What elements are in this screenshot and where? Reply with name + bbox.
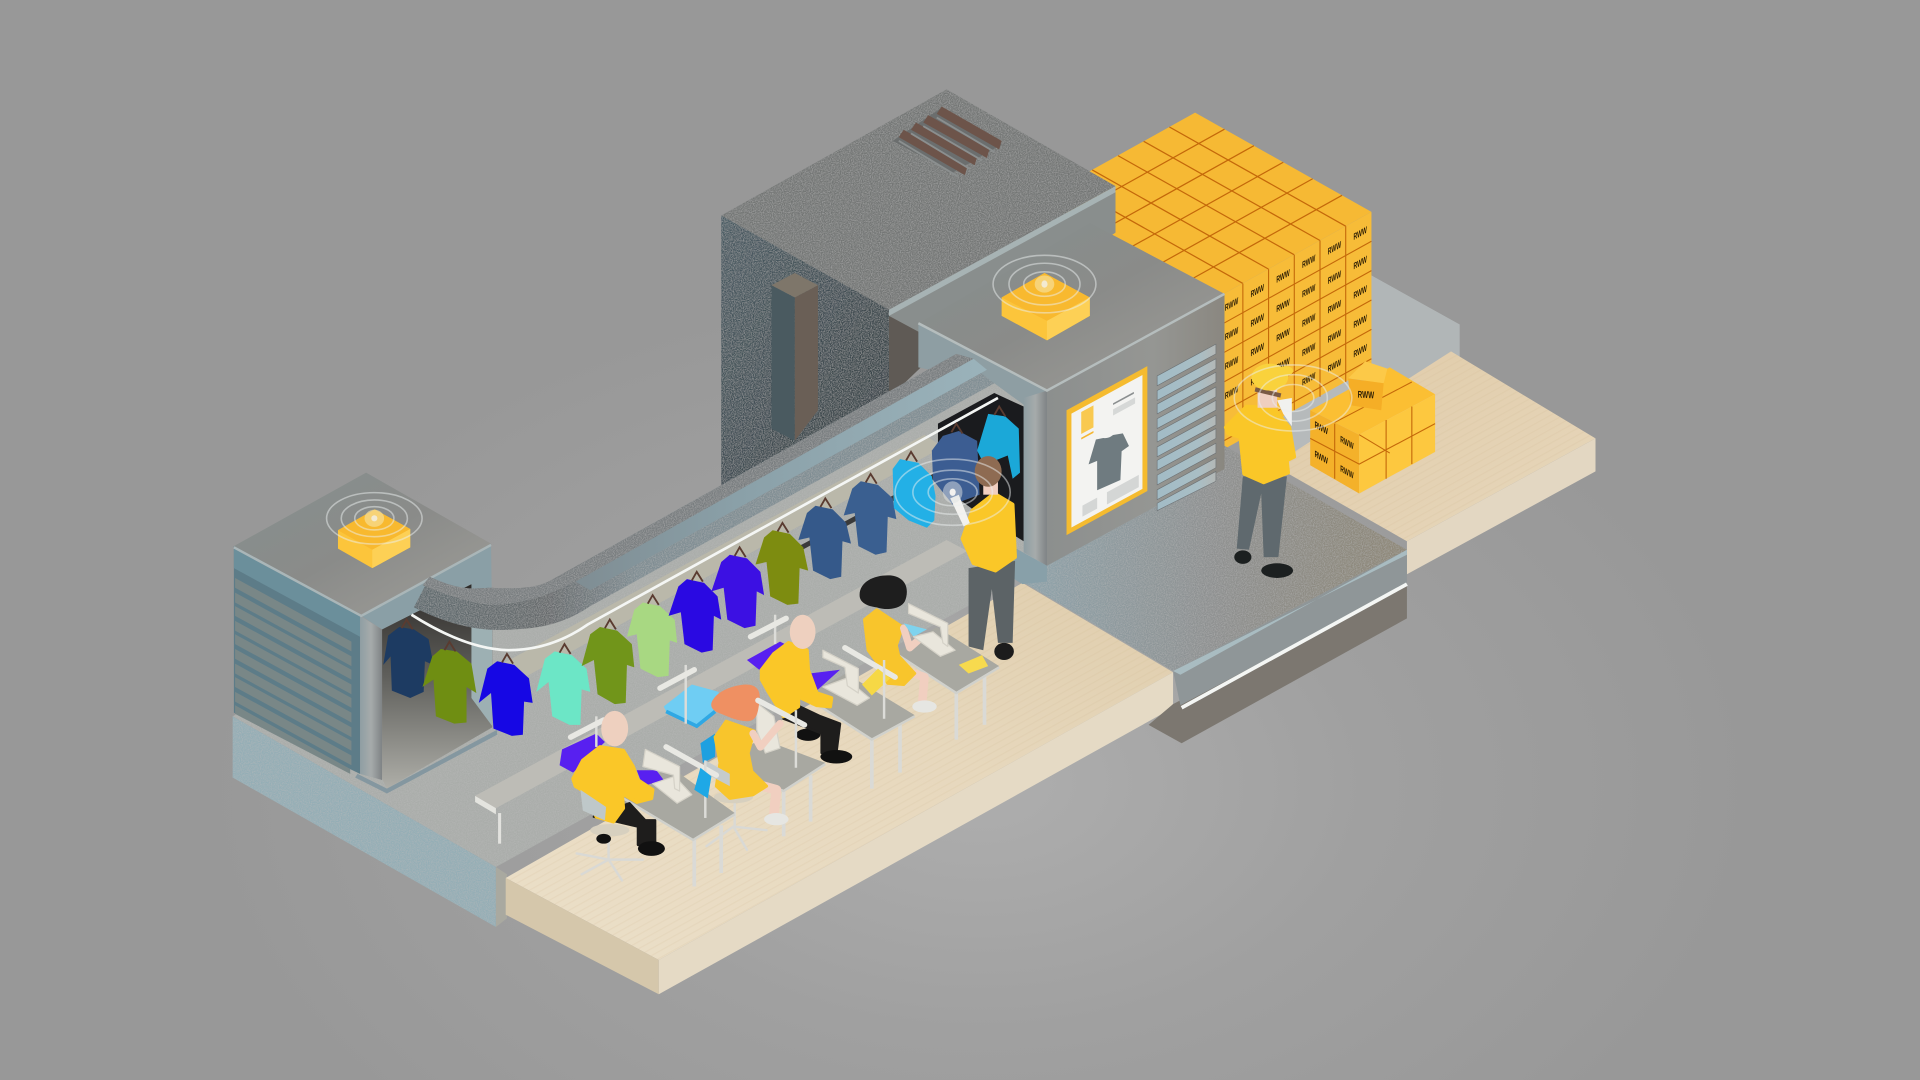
- shirt: mint: [536, 644, 590, 725]
- fabric stack purple: [747, 642, 790, 670]
- wood platform: right: [1273, 351, 1596, 574]
- worker 2 shoe: [764, 813, 789, 825]
- lower slab: [1149, 582, 1407, 743]
- machine right face: [1047, 294, 1224, 566]
- cube opening with dark back wall: [382, 584, 492, 789]
- hanging t-shirts: [383, 407, 1020, 736]
- cyan cloth hanging: [694, 768, 711, 798]
- worker neck: [1258, 389, 1277, 408]
- wood platform: long front: [506, 583, 1173, 994]
- chair 1 back: [580, 790, 606, 820]
- stack box top: [1310, 367, 1435, 435]
- shirt: cyan: [893, 452, 936, 528]
- small box stack: RWW: [1315, 419, 1328, 437]
- stack side face: RWW: [1251, 370, 1264, 388]
- worker cap: [1251, 364, 1293, 391]
- stack side face: RWW: [1225, 324, 1239, 343]
- stack box right: [1359, 394, 1435, 493]
- stack side face: RWW: [1225, 354, 1239, 372]
- stack side face: RWW: [1302, 340, 1316, 359]
- machine opening: [938, 393, 1024, 541]
- worker 1 head: [601, 711, 628, 746]
- duct lit band: [576, 359, 987, 590]
- table 2 with seated worker: [660, 665, 825, 850]
- conveyor work table: [475, 540, 967, 844]
- stack side face: RWW: [1251, 311, 1264, 329]
- stack top face: [1041, 113, 1371, 298]
- stack side face: RWW: [1302, 281, 1316, 300]
- stack side face: RWW: [1302, 370, 1316, 388]
- slab top: [1022, 446, 1407, 671]
- small box stack: RWW: [1340, 434, 1354, 452]
- sewing machine 1: [643, 749, 692, 803]
- duct upper band: [422, 354, 973, 605]
- stack side face: RWW: [1354, 283, 1367, 301]
- worker 3 pants: [784, 707, 840, 753]
- worker 1 far shoe: [596, 834, 611, 844]
- pillar on building wall: [771, 273, 818, 441]
- supervisor paper: [950, 495, 970, 527]
- rod divider: [751, 615, 786, 644]
- chair 1 base: [577, 824, 643, 880]
- sewing machine 4: [909, 604, 955, 656]
- table 2: [720, 738, 825, 836]
- worker 3 head: [790, 615, 816, 649]
- supervisor neck: [983, 480, 998, 495]
- table 1 with seated worker: [560, 711, 735, 887]
- worker 3 shoe: [820, 750, 852, 763]
- worker 1 shoe: [638, 841, 665, 856]
- supervisor shirt: [962, 493, 1015, 571]
- cube upper right band: [361, 544, 492, 631]
- stack side face: RWW: [1328, 268, 1342, 287]
- signal rings: supervisor paper: [895, 459, 1010, 525]
- stack side face: RWW: [1354, 341, 1367, 360]
- fabric stack violet: [560, 733, 605, 773]
- stack side face: [1217, 212, 1371, 453]
- stack side face: RWW: [1251, 340, 1264, 359]
- stack side face: RWW: [1328, 327, 1342, 345]
- worker 2 hair: [711, 684, 760, 721]
- supervisor head: [975, 456, 1002, 487]
- slab side: [1173, 550, 1407, 705]
- stack side face: RWW: [1354, 312, 1367, 331]
- supervisor shoe: [994, 643, 1014, 660]
- pole 2: [795, 710, 797, 768]
- worker 2 dress: [715, 721, 767, 798]
- worker hair band: [1255, 389, 1281, 396]
- worker 4 hair: [860, 575, 907, 609]
- poster shirt: [1089, 421, 1129, 497]
- fabric stack cyan: [664, 684, 719, 726]
- stack side face: RWW: [1302, 252, 1316, 271]
- concrete left side: [233, 716, 496, 927]
- table 4: [896, 627, 999, 740]
- building top face: [721, 89, 1116, 310]
- worker pants: [1237, 476, 1287, 557]
- cube floor edge: [355, 730, 497, 793]
- light strip: [1182, 584, 1407, 708]
- worker shoes: [1234, 550, 1293, 578]
- small box stack: RWW: [1315, 448, 1328, 467]
- stack box left: [1310, 410, 1359, 493]
- duct body: [414, 354, 994, 630]
- worker 2 arm: [753, 724, 780, 747]
- purple cloth on table: [809, 670, 840, 691]
- roof vent slats: [893, 107, 1002, 176]
- shirt: navy: [383, 620, 433, 698]
- purple cloth: [637, 770, 664, 786]
- worker 1 shirt: [573, 747, 653, 822]
- shirt: blue: [479, 654, 533, 736]
- rod 2: [758, 700, 804, 725]
- stack side face: RWW: [1276, 326, 1290, 344]
- rod 3: [845, 648, 895, 677]
- shirt: slate: [798, 498, 851, 579]
- shirt: olive: [422, 642, 476, 724]
- stack side face: RWW: [1225, 295, 1239, 314]
- stack side face: RWW: [1302, 311, 1316, 329]
- stack side face: RWW: [1354, 253, 1367, 272]
- worker 4 shoe: [912, 700, 937, 713]
- shirt: slate back: [932, 424, 980, 504]
- worker 4 dress: [864, 610, 915, 684]
- cube louver face: [234, 546, 361, 774]
- machine top face: [918, 223, 1224, 391]
- rod divider 1: [571, 716, 604, 747]
- standing supervisor with paper: [950, 456, 1015, 660]
- shirt: green: [582, 620, 634, 704]
- stack side face: RWW: [1251, 281, 1264, 300]
- worker 1 pants: [594, 803, 655, 845]
- left machine cube: [234, 473, 497, 793]
- table 1: [623, 767, 735, 887]
- metal platform: [1022, 446, 1407, 743]
- yellow cloth: [862, 669, 890, 696]
- worker 4 leg: [913, 673, 924, 704]
- vertical louvers: [1157, 344, 1216, 511]
- stack side face: RWW: [1225, 383, 1239, 402]
- chair 2 back: [705, 760, 730, 786]
- yellow note: [959, 655, 988, 673]
- cube front post: [360, 616, 382, 780]
- rod 1: [666, 747, 716, 775]
- shirt: violet blue 2: [711, 547, 764, 628]
- stack side face: RWW: [1354, 224, 1367, 243]
- product poster with t-shirt: [1067, 366, 1147, 535]
- cyan cloth at machine 4: [904, 623, 927, 637]
- iot sensor: left: [327, 493, 422, 568]
- sewing machine 3: [823, 650, 869, 705]
- shirt: light green: [627, 595, 677, 677]
- back shelf strip: [496, 435, 943, 680]
- shirt: cyan back: [977, 407, 1020, 479]
- rod divider 2: [660, 665, 694, 724]
- shirt: moss: [756, 523, 808, 605]
- table 4 with seated worker: [860, 575, 999, 740]
- building left face: [721, 216, 889, 487]
- worker tablet: [1277, 398, 1292, 426]
- building right face: [889, 186, 1116, 398]
- worker shirt: [1226, 407, 1294, 482]
- worker 2 leg: [763, 786, 776, 816]
- shirt: violet blue: [669, 572, 721, 653]
- chair 2: [707, 791, 767, 850]
- loose top box: RWW: [1358, 389, 1374, 401]
- cube rear post: [471, 618, 492, 726]
- wall of stacked yellow boxes: [1041, 113, 1371, 453]
- worker 3 shirt: [762, 643, 831, 716]
- iot sensor: right: [993, 255, 1096, 340]
- pole 3: [883, 660, 885, 719]
- signal rings: tablet: [1234, 365, 1352, 431]
- sewing machine 2: [757, 703, 780, 753]
- stack side face: RWW: [1276, 355, 1290, 374]
- stack side face: RWW: [1276, 296, 1290, 315]
- stack side face: RWW: [1328, 297, 1342, 316]
- hanging rail: [411, 398, 998, 650]
- right machine cube: [918, 223, 1224, 584]
- small box stack: [1310, 361, 1435, 493]
- cube top face: [234, 473, 491, 616]
- pole 1: [704, 760, 706, 818]
- table 3: [807, 673, 915, 789]
- worker 3 far shoe: [796, 729, 820, 741]
- machine left face and post: [918, 323, 1047, 566]
- table 3 with seated worker: [747, 615, 915, 789]
- stack side face: RWW: [1328, 239, 1342, 257]
- overhead duct: [414, 354, 994, 630]
- stack side face: RWW: [1276, 267, 1290, 285]
- machine threshold: [992, 549, 1047, 584]
- standing worker with cap and tablet: [1226, 364, 1294, 578]
- back concrete ledge: [1224, 276, 1460, 453]
- small box stack: RWW: [1340, 463, 1354, 482]
- shirt: slate 2: [844, 474, 896, 555]
- worker 4 arm: [904, 628, 921, 648]
- supervisor pants: [969, 561, 1015, 650]
- large grey building: [721, 89, 1116, 487]
- concrete base: front block: [233, 373, 1041, 927]
- cyan cloth: [700, 733, 715, 763]
- stack side face: RWW: [1328, 356, 1342, 375]
- concrete top: [233, 373, 1041, 867]
